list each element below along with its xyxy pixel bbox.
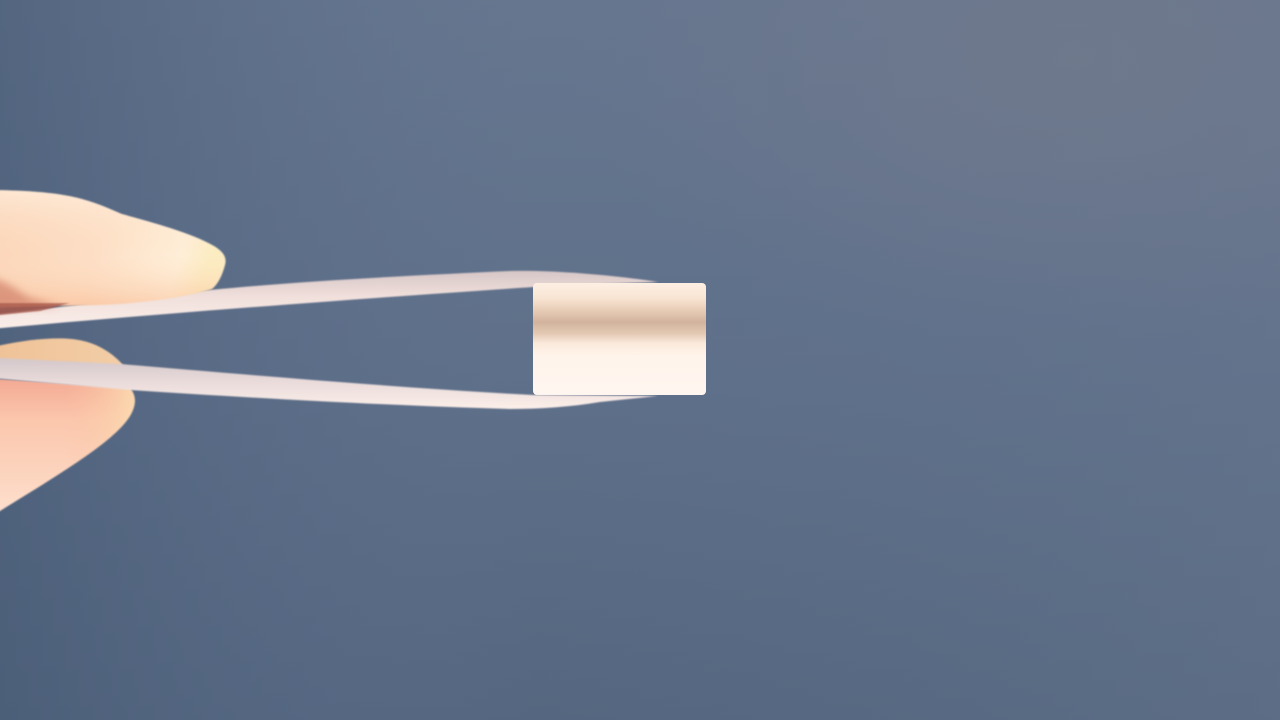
magnet cylinder <box>533 283 706 395</box>
lower thumb <box>0 378 135 525</box>
upper finger <box>0 190 226 317</box>
upper tweezer arm <box>0 271 658 330</box>
lower finger behind tweezers <box>0 338 123 372</box>
lower tweezer arm <box>0 357 658 409</box>
